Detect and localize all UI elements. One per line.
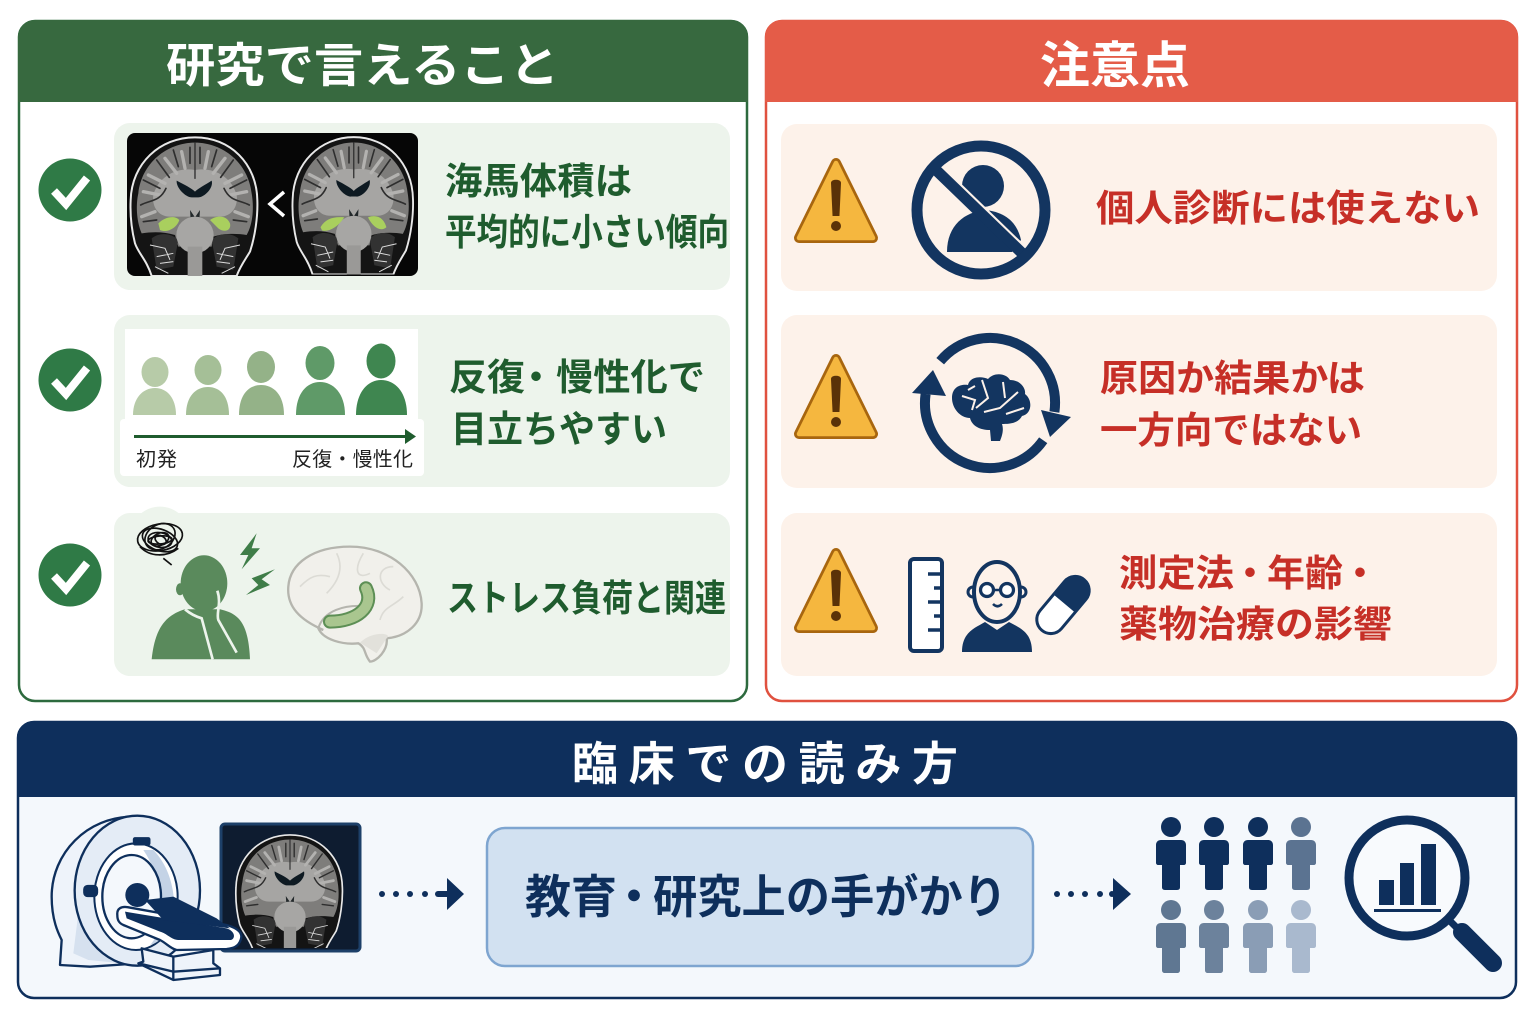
item: stress load (38, 507, 730, 676)
icon: ruler (910, 559, 942, 651)
icon: capsule (1030, 569, 1096, 640)
icon: check (38, 348, 102, 412)
item: bidirectional cause and effect (781, 315, 1497, 488)
text: measurement, age, medication: ・ (1342, 553, 1378, 594)
panel: cautions (765, 20, 1518, 701)
icon: no person (917, 146, 1045, 274)
text: bidirectional (1100, 358, 1365, 451)
text: measurement, age, medication: ・ (1232, 553, 1268, 594)
text: measurement, age, medication: 測定法 (1119, 553, 1234, 594)
icon: warning (799, 359, 873, 434)
arrow: to clues (379, 878, 464, 910)
text: not for individual diagnosis: 個人診断には使えない (1096, 188, 1480, 229)
item: recurrence and chronicity (38, 315, 730, 487)
callout: educational and research clue: ・ (611, 871, 657, 923)
text: hippocampal volume: 平均的に小さい傾向 (445, 212, 729, 253)
icon: check (38, 544, 102, 606)
panel: clinical interpretation (17, 721, 1517, 998)
image: coronal MRI (221, 824, 360, 951)
panel: research findings (18, 20, 748, 701)
item: hippocampal volume (38, 123, 730, 290)
heading: cautions: 注意点 (1040, 38, 1190, 94)
text: hippocampal volume: 海馬体積は (445, 161, 632, 202)
heading: research findings: 研究で言えること (166, 39, 559, 92)
icon: stressed person (132, 507, 275, 659)
item: measurement, age, medication (781, 513, 1497, 676)
heading: clinical interpretation: 臨床での読み方 (572, 738, 958, 790)
icon: older person (962, 562, 1032, 652)
text: recurrence: 反復 (449, 357, 525, 398)
chart: people from first episode to chronic: 初発 (136, 448, 177, 471)
text: recurrence: ・ (518, 357, 554, 398)
text: bidirectional: 一方向ではない (1100, 410, 1362, 451)
chart: people from first episode to chronic (120, 329, 424, 476)
text: recurrence (449, 357, 705, 450)
icon: warning (799, 553, 873, 628)
text: stress load: ストレス負荷と関連 (447, 578, 726, 619)
icon: brain cycle (912, 338, 1071, 468)
callout: educational and research clue: 研究上の手がかり (653, 871, 1007, 923)
icon: brain with hippocampus (288, 547, 422, 662)
text: recurrence: 慢性化で (556, 357, 705, 398)
text: measurement, age, medication: 年齢 (1267, 553, 1343, 594)
text: hippocampal volume (445, 161, 729, 253)
arrow: to population (1054, 878, 1131, 910)
icon: magnifier with bar chart (1349, 820, 1493, 963)
icon: population grid (1156, 817, 1316, 973)
text: recurrence: 目立ちやすい (451, 409, 667, 450)
item: not for individual diagnosis (781, 124, 1497, 291)
text: measurement, age, medication: 薬物治療の影響 (1119, 604, 1392, 645)
text: measurement, age, medication (1119, 553, 1392, 645)
heading: research findings (18, 20, 748, 102)
icon: warning (799, 163, 873, 238)
icon: MRI scanner (52, 816, 241, 980)
heading: cautions (765, 20, 1518, 102)
text: bidirectional: 原因か結果かは (1100, 358, 1365, 399)
icon: check (38, 158, 102, 222)
callout: educational and research clue: 教育 (525, 871, 617, 923)
callout: educational and research clue (487, 828, 1033, 966)
image: brain MRI comparison (127, 133, 418, 276)
heading: clinical interpretation (17, 721, 1517, 797)
chart: people from first episode to chronic: 反復・慢性化 (292, 448, 413, 471)
